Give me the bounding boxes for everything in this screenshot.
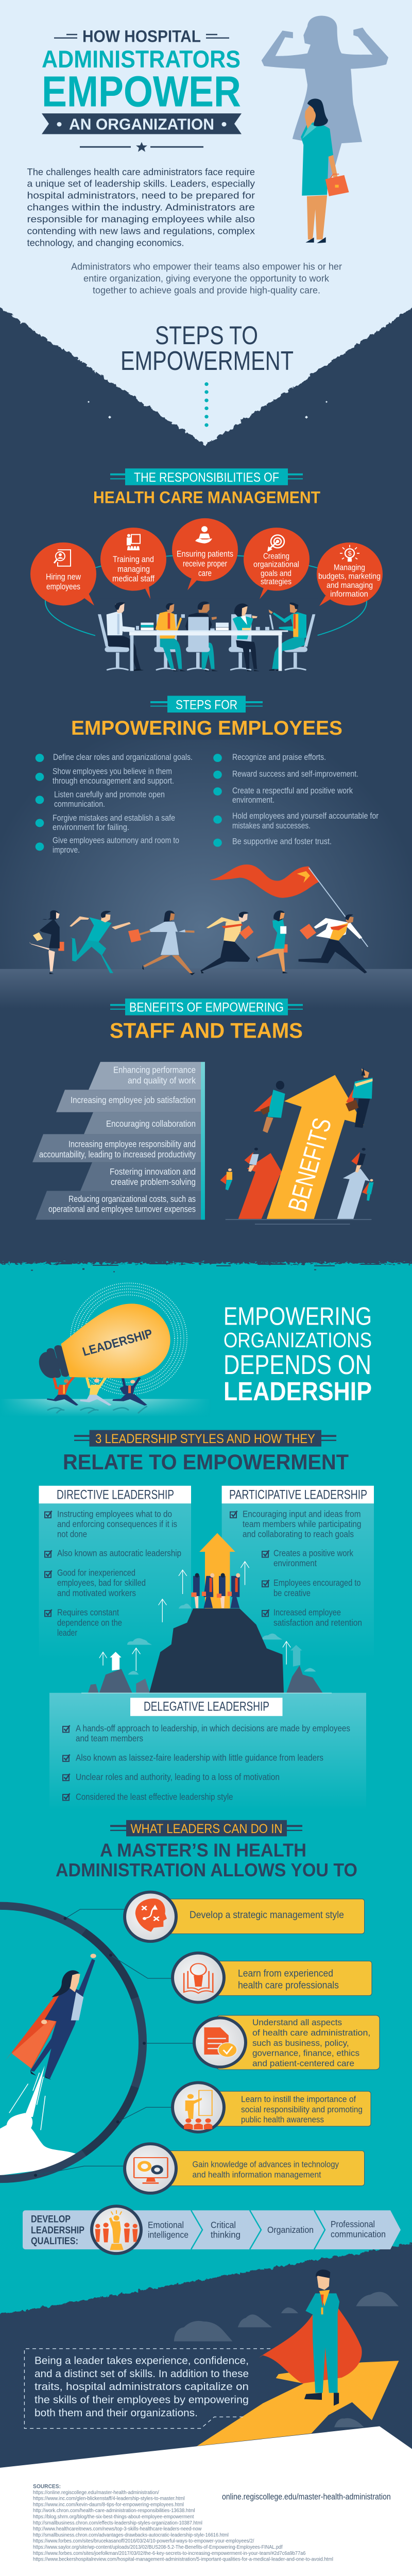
sources list: http://www.healthcareitnews.com/news/top-3-skills-healthcare-leaders-need-now (33, 2526, 202, 2532)
text block: intro paragraph: changes within the industry. Administrators are (27, 202, 255, 213)
flyer: small figures (220, 1148, 374, 1201)
benefit step (89, 1062, 201, 1090)
benefit step: and quality of work (128, 1075, 196, 1086)
illustration: leaders on a mountain peak (88, 1533, 323, 1693)
panel: responsibilities of health care management (30, 468, 383, 674)
card: technology and information management (125, 2144, 365, 2193)
checklist item: and team members (76, 1733, 143, 1743)
checklist item: Creates a positive work (273, 1548, 354, 1558)
staircase list of benefits (32, 1062, 205, 1219)
text block: intro paragraph: a unique set of leadership skills. Leaders, especially (27, 179, 255, 190)
checklist item (63, 1723, 350, 1743)
checklist item: Unclear roles and authority, leading to a loss of motivation (76, 1772, 280, 1782)
arrow: big yellow (267, 1075, 364, 1219)
quality: professional communication (331, 2219, 386, 2239)
icon: trainer at board (127, 534, 140, 550)
sources list: https://www.inc.com/kevin-daum/8-tips-for-empowering-employees.html (33, 2502, 184, 2507)
connector oval (45, 555, 367, 649)
white footer shape (0, 2426, 412, 2576)
meeting table scene (95, 598, 318, 674)
benefit step (84, 1112, 201, 1134)
text block: intro paragraph: contending with new laws and regulations, complex (27, 226, 255, 237)
stack of books (141, 623, 153, 630)
banner: benefits of empowering: BENEFITS OF EMPOWERING (129, 1001, 284, 1014)
speech bubble: creating organizational goals and strategies: Creating (263, 552, 289, 561)
title line: administrators: ADMINISTRATORS (42, 46, 241, 73)
checklist item: and motivated workers (57, 1588, 136, 1598)
speech bubble: ensuring patients receive proper care: Ensuring patients (177, 549, 233, 559)
banner: steps for (150, 696, 263, 713)
checklist item: Good for inexperienced (57, 1568, 135, 1578)
clouds (127, 1604, 316, 1674)
checklist item: and collaborating to reach goals (243, 1529, 354, 1539)
heading: a master's in health administration allows you to (56, 1839, 357, 1880)
quality: professional communication: Professional (331, 2219, 375, 2229)
mugs (256, 627, 269, 630)
person: man in white shirt (107, 602, 144, 671)
sources heading: SOURCES: (33, 2483, 61, 2490)
sources list: https://www.forbes.com/sites/brucekasanoff/2016/03/24/10-powerful-ways-to-empower-your-employees/2/ (33, 2538, 254, 2544)
checklist item: Also known as laissez-faire leadership with little guidance from leaders (76, 1753, 323, 1762)
runner: man in teal scrubs (70, 911, 131, 973)
step item: Be supportive and foster trust. (232, 837, 332, 846)
card: social responsibility (173, 2082, 371, 2132)
ground lines (226, 1219, 371, 1224)
card: technology and information management: Gain knowledge of advances in technology (193, 2160, 339, 2169)
icon: monitor with gears (134, 2158, 168, 2184)
text block: intro paragraph: responsible for managing employees while also (27, 214, 255, 225)
benefit step: operational and employee turnover expenses (48, 1204, 196, 1214)
step item: Create a respectful and positive work (232, 786, 353, 795)
sources list: https://blog.shrm.org/blog/the-six-best-things-about-employee-empowerment (33, 2514, 194, 2520)
arrow: big yellow (199, 1533, 235, 1608)
text block: empowerment statement (71, 262, 342, 296)
speech bubble: managing budgets, marketing and information (317, 543, 383, 606)
quality: critical thinking: thinking (211, 2230, 241, 2240)
ribbon: an organization (42, 113, 242, 134)
benefit step (32, 1134, 201, 1162)
card: strategic management style (125, 1892, 365, 1941)
torn V-shaped background (0, 289, 412, 445)
speech bubble: training and managing medical staff: medical staff (112, 574, 154, 583)
speech bubble: creating organizational goals and strategies (244, 528, 310, 599)
icon: presenter and audience (184, 2090, 212, 2129)
quality: professional communication: communication (331, 2229, 386, 2239)
sources list: http://smallbusiness.chron.com/advantages-drawbacks-autocratic-leadership-style-16616.html (33, 2532, 229, 2538)
list: right column steps (213, 752, 379, 847)
step item: Show employees you believe in them (53, 767, 172, 776)
arrow: pale blue (337, 1168, 370, 1219)
panel: what a master's degree allows you to do (0, 1820, 380, 2193)
sources list (33, 2489, 333, 2563)
panel: steps for empowering employees (29, 696, 379, 975)
icon: muscular silhouette shadow (262, 15, 388, 182)
checklist item: Employees encouraged to (273, 1578, 361, 1588)
callout: closing statement: Being a leader takes experience, confidence, (35, 2355, 249, 2366)
benefit step: Reducing organizational costs, such as (68, 1194, 196, 1204)
floor glow (0, 1399, 211, 1417)
step item (213, 786, 353, 805)
card: understand health care administration: and patient-centered care (252, 2059, 354, 2068)
callout: closing statement: both them and their organizations. (35, 2407, 198, 2419)
callout: closing statement: and a distinct set of skills. In addition to these (35, 2368, 249, 2380)
benefit step (36, 1191, 201, 1219)
text block: intro paragraph: hospital administrators, need to be prepared for (27, 191, 255, 201)
speech bubble: training and managing medical staff: Training and (113, 554, 154, 564)
banner: steps for: STEPS FOR (176, 698, 237, 712)
panel: directive leadership (39, 1486, 191, 1659)
quality: critical thinking (211, 2220, 241, 2240)
text block: intro paragraph (27, 167, 255, 248)
icon: lightbulb with dollar: $ (348, 550, 352, 557)
checklist item: Encouraging input and ideas from (243, 1509, 360, 1519)
illustration: people running to the flag (29, 910, 367, 975)
callout: closing statement: the skills of their employees by empowering (35, 2394, 249, 2405)
dotted connector (204, 382, 209, 427)
speech bubble: hiring new employees: Hiring new (46, 572, 81, 582)
checklist item (45, 1509, 177, 1539)
runner: man in yellow shirt (200, 912, 253, 973)
page background (0, 0, 412, 1272)
checklist item: employees, bad for skilled (57, 1578, 146, 1588)
card: understand health care administration: Understand all aspects (252, 2018, 342, 2027)
checklist item (262, 1548, 354, 1568)
panel: benefits of empowering staff and teams (32, 998, 374, 1224)
heading: empowering organizations depends on leadership: EMPOWERING (224, 1302, 372, 1330)
lightbulb (36, 1303, 170, 1380)
heading: relate to empowerment: RELATE TO EMPOWERMENT (63, 1450, 349, 1475)
speech bubble: ensuring patients receive proper care: receive proper (183, 559, 227, 569)
step item: Reward success and self-improvement. (232, 769, 358, 778)
person: man seen from behind (185, 602, 218, 671)
checklist item: A hands-off approach to leadership, in which decisions are made by employees (76, 1723, 350, 1733)
icon: target with arrow (267, 535, 284, 552)
team of leaders on the peak (191, 1573, 240, 1608)
benefit step: accountability, leading to increased productivity (39, 1149, 196, 1159)
heading: empowering organizations depends on leadership (224, 1302, 372, 1406)
card: understand health care administration: such as business, policy, (252, 2038, 349, 2048)
banner: 3 leadership styles and how they: 3 LEADERSHIP STYLES AND HOW THEY (95, 1432, 315, 1446)
checklist item (262, 1607, 362, 1628)
sources list: http://work.chron.com/health-care-administration-responsibilities-13638.html (33, 2507, 195, 2514)
checklist item: Instructing employees what to do (57, 1509, 172, 1519)
card: understand health care administration: governance, finance, ethics (252, 2048, 359, 2058)
title line: how hospital: HOW HOSPITAL (82, 27, 201, 46)
stack of books (216, 623, 229, 630)
heading: staff and teams: STAFF AND TEAMS (110, 1019, 303, 1043)
checklist item: not done (57, 1529, 87, 1539)
speech bubble: hiring new employees: employees (46, 582, 80, 591)
checklist item: be creative (273, 1588, 311, 1598)
person: woman in teal jacket (233, 603, 260, 671)
person: man in yellow jacket (156, 603, 186, 671)
cape (5, 1987, 66, 2069)
arrow: teal (290, 1645, 302, 1667)
panel: participative leadership (222, 1486, 374, 1659)
heading: a master's in health administration allows you to: A MASTER’S IN HEALTH (100, 1839, 306, 1860)
ribbon: an organization: AN ORGANIZATION (69, 115, 214, 133)
panel: participative leadership: PARTICIPATIVE LEADERSHIP (229, 1488, 367, 1502)
checklist item: team members while participating (243, 1519, 362, 1529)
heading: a master's in health administration allows you to: ADMINISTRATION ALLOWS YOU TO (56, 1859, 357, 1880)
speech bubble: ensuring patients receive proper care: care (198, 568, 212, 578)
checklist item: environment (273, 1558, 317, 1568)
dotted rings (71, 1283, 187, 1395)
card: learn from experienced professionals: health care professionals (238, 1980, 339, 1991)
step item: communication. (54, 799, 105, 809)
speech bubble: managing budgets, marketing and information: information (330, 589, 368, 599)
flyer: woman in teal (253, 1081, 285, 1133)
flyer: man in teal shirt (346, 1067, 372, 1128)
panel: empowering organizations depends on leadership (0, 1283, 372, 1417)
porter figures (47, 1377, 147, 1413)
benefit step: Fostering innovation and (110, 1166, 196, 1177)
table (123, 631, 288, 671)
icon: caring hand (195, 526, 212, 544)
runner: woman in pale dress (128, 910, 195, 975)
list: left column steps (36, 752, 193, 855)
benefit step: Increasing employee responsibility and (68, 1139, 196, 1149)
quality: critical thinking: Critical (211, 2220, 236, 2230)
step item: Listen carefully and promote open (54, 790, 165, 800)
panel: steps to empowerment heading (121, 321, 294, 427)
sources list: https://www.inc.com/glen-blickenstaff/4-leadership-styles-to-master.html (33, 2496, 185, 2502)
step item (36, 813, 175, 832)
speech bubble: creating organizational goals and strategies: organizational (253, 560, 299, 569)
speech bubble: training and managing medical staff: managing (117, 565, 150, 574)
speech bubble: ensuring patients receive proper care (172, 518, 238, 590)
card: understand health care administration: of health care administration, (252, 2028, 370, 2038)
icon: document with check (204, 2027, 237, 2057)
step item: Hold employees and yourself accountable for (232, 811, 379, 821)
heading: empowering employees: EMPOWERING EMPLOYEES (71, 717, 342, 739)
checklist item (262, 1578, 360, 1598)
heading: empowering organizations depends on leadership: ORGANIZATIONS (224, 1328, 372, 1352)
panel: sources footer (33, 2483, 391, 2563)
checklist item: Requires constant (57, 1607, 119, 1617)
arrow: red (238, 1153, 284, 1219)
checklist item (230, 1509, 362, 1539)
clouds (174, 2292, 399, 2427)
card: learn from experienced professionals (173, 1953, 372, 2002)
illustration: people carrying leadership lightbulb (0, 1283, 211, 1417)
icon: resume search (54, 550, 71, 566)
torn diagonal dark background (0, 2240, 412, 2520)
callout: closing statement (24, 2349, 270, 2429)
card: social responsibility: social responsibility and promoting (241, 2105, 363, 2114)
quality: emotional intelligence (148, 2220, 188, 2240)
title line: empower: EMPOWER (42, 67, 241, 116)
step item (36, 790, 165, 809)
step item: environment for failing. (53, 822, 129, 832)
sources list: https://www.saylor.org/site/wp-content/uploads/2013/02/BUS208-5.2-The-Benefits-of-Empowering-Employees-FINAL.pdf (33, 2544, 283, 2550)
card: social responsibility: public health awareness (241, 2115, 324, 2124)
step item: Give employees automony and room to (53, 836, 179, 845)
checklist item (45, 1607, 122, 1638)
bar: develop leadership qualities: LEADERSHIP (31, 2225, 84, 2236)
card: understand health care administration (194, 2015, 380, 2070)
text block: empowerment statement: together to achieve goals and provide high-quality care. (93, 285, 320, 296)
runner: woman in teal dress (256, 910, 288, 973)
panel: closing leader section (0, 2206, 412, 2576)
step item: environment. (232, 795, 274, 805)
panel: hero (27, 15, 388, 296)
quality: organization: Organization (267, 2225, 314, 2235)
step item: through encouragement and support. (53, 776, 174, 786)
benefit step (56, 1090, 201, 1112)
panel: delegative leadership (49, 1693, 366, 1808)
bulb label: leadership: LEADERSHIP (81, 1327, 154, 1359)
arrow label: benefits: BENEFITS (283, 1115, 337, 1214)
quality: emotional intelligence: Emotional (148, 2220, 184, 2230)
icon: waving red flag (210, 865, 368, 947)
checklist item: satisfaction and retention (273, 1618, 362, 1628)
heading: empowerment: EMPOWERMENT (121, 346, 294, 376)
checklist item: Increased employee (273, 1607, 341, 1617)
panel: teal leadership section background (0, 1263, 412, 2348)
text block: empowerment statement: entire organization, giving everyone the opportunity to work (83, 274, 329, 284)
sources list: http://smallbusiness.chron.com/effects-leadership-styles-organization-10387.html (33, 2520, 202, 2526)
card: learn from experienced professionals: Learn from experienced (238, 1968, 333, 1979)
heading: empowering organizations depends on leadership: DEPENDS ON (224, 1350, 371, 1380)
heading: empowering organizations depends on leadership: LEADERSHIP (224, 1377, 372, 1406)
benefit step: Encouraging collaboration (106, 1118, 196, 1129)
step item: Forgive mistakes and establish a safe (53, 813, 175, 823)
card: strategic management style: Develop a strategic management style (190, 1910, 344, 1921)
banner: the responsibilities of: THE RESPONSIBILITIES OF (134, 471, 279, 485)
icon: book with bulb (184, 1963, 213, 1993)
step item (213, 837, 332, 847)
speech bubble: creating organizational goals and strategies: strategies (261, 577, 291, 586)
star divider (80, 142, 203, 152)
cape (259, 2308, 362, 2383)
suit (30, 1959, 95, 2079)
step item: Recognize and praise efforts. (232, 752, 326, 762)
step item (213, 811, 379, 831)
step item (36, 836, 179, 855)
sources list: https://www.forbes.com/sites/joefolkman/2017/03/02/the-6-key-secrets-to-increasing-empowerment-in-your-team/#2d7c6a9b77a6 (33, 2550, 306, 2556)
speech bubble: managing budgets, marketing and information: Managing (334, 563, 365, 572)
checklist item: Considered the least effective leadership style (76, 1792, 233, 1802)
icon: leader among team (95, 2210, 138, 2250)
text block: empowerment statement: Administrators who empower their teams also empower his or her (71, 262, 342, 272)
heading: health care management: HEALTH CARE MANAGEMENT (93, 488, 320, 507)
speech bubble: hiring new employees (30, 543, 96, 605)
suit (305, 2293, 339, 2393)
speech bubble: managing budgets, marketing and information: budgets, marketing (318, 572, 381, 581)
step item: improve. (53, 845, 80, 855)
step item: mistakes and successes. (232, 821, 311, 831)
panel: 3 leadership styles (39, 1430, 374, 1808)
banner: what leaders can do in: WHAT LEADERS CAN DO IN (131, 1822, 282, 1836)
checklist item (45, 1568, 146, 1598)
icon: strategic head (135, 1899, 167, 1932)
rocket smoke (0, 2065, 78, 2175)
checklist item: leader (57, 1628, 77, 1638)
benefit step (80, 1162, 201, 1191)
big yellow arrow (197, 2361, 399, 2446)
rock peaks (88, 1608, 323, 1693)
arrow: white (110, 1652, 122, 1671)
benefit step: creative problem-solving (111, 1177, 196, 1187)
person: man in teal suit presenting (269, 602, 306, 671)
speech bubble: training and managing medical staff (100, 528, 166, 599)
benefit step: Enhancing performance (113, 1065, 196, 1075)
panel: delegative leadership: DELEGATIVE LEADERSHIP (144, 1700, 269, 1714)
card: technology and information management: and health information management (193, 2170, 321, 2179)
benefit step: Increasing employee job satisfaction (71, 1095, 196, 1105)
sources list: https://www.beckershospitalreview.com/hospital-management-administration/5-important-qualities-for-a-medical-leader-and-one-to-avoid.html (33, 2556, 333, 2563)
checklist item: dependence on the (57, 1618, 122, 1628)
speech bubble: creating organizational goals and strategies: goals and (261, 569, 291, 578)
illustration: superwoman launching (0, 1954, 96, 2175)
bar: develop leadership qualities (23, 2206, 401, 2253)
runner: leader in white coat (299, 914, 367, 973)
checklist item: and enforcing consequences if it is (57, 1519, 177, 1529)
speech bubble: managing budgets, marketing and information: and managing (327, 581, 373, 590)
runner: woman in black suit (29, 910, 64, 974)
ring (0, 1906, 143, 2179)
step item (36, 767, 174, 786)
callout: closing statement: traits, hospital administrators capitalize on (35, 2381, 249, 2393)
title (42, 27, 242, 152)
text block: intro paragraph: The challenges health care administrators face require (27, 167, 255, 178)
thin rising arrows (99, 1562, 290, 1671)
quality: emotional intelligence: intelligence (148, 2230, 188, 2240)
heading: steps to: STEPS TO (155, 321, 258, 350)
illustration: superhero leader on arrow (174, 2269, 399, 2446)
illustration: rising benefit arrows with caped staff (220, 1067, 374, 1224)
text block: intro paragraph: technology, and changing economics. (27, 238, 184, 248)
checklist item: Also known as autocratic leadership (57, 1548, 181, 1558)
connector lines (34, 1909, 193, 2177)
step item (213, 752, 326, 762)
bar: develop leadership qualities: QUALITIES: (31, 2235, 78, 2247)
card: social responsibility: Learn to instill the importance of (241, 2095, 356, 2104)
sources list: https://online.regiscollege.edu/master-health-administration/ (33, 2489, 159, 2496)
panel: directive leadership: DIRECTIVE LEADERSHIP (57, 1488, 174, 1502)
step item: Define clear roles and organizational goals. (53, 752, 193, 762)
icon: businesswoman with briefcase (301, 99, 349, 243)
bar: develop leadership qualities: DEVELOP (31, 2214, 71, 2225)
